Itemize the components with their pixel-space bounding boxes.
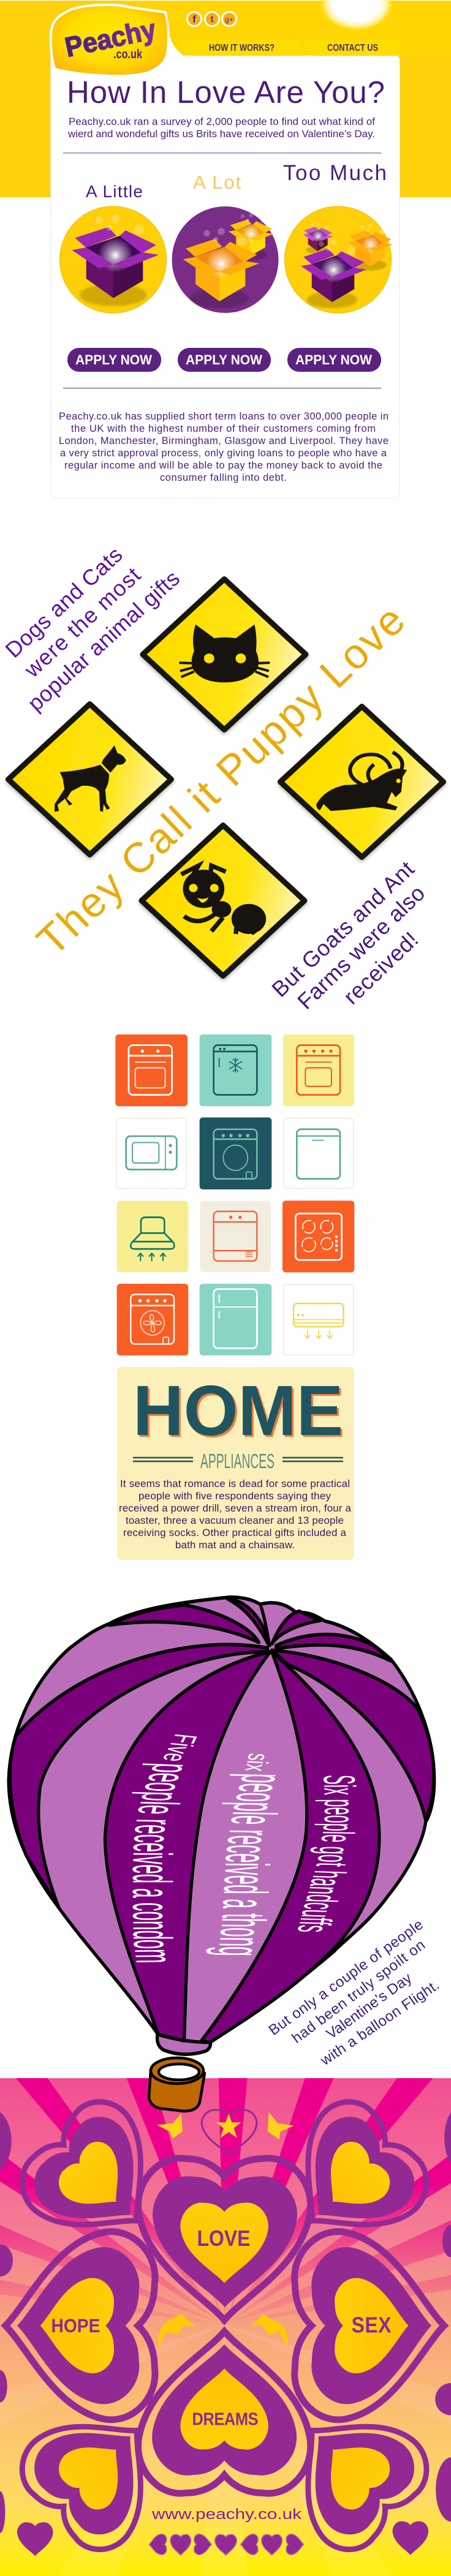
icon: microwave bbox=[116, 1118, 186, 1188]
icon: star in outlined heart bbox=[202, 2110, 257, 2155]
callout: goats and ant farms: Farms were also bbox=[292, 880, 430, 1014]
button: apply now 1: APPLY NOW bbox=[75, 352, 152, 367]
heart: top left bbox=[9, 2087, 183, 2269]
balloon callout: Valentine’s Day bbox=[324, 1970, 415, 2043]
appliances text block: toaster, three a vacuum cleaner and 13 people bbox=[126, 1515, 344, 1526]
balloon label: five people received a condom: people received a condom bbox=[132, 1763, 183, 1962]
company text block: the UK with the highest number of their customers coming from bbox=[71, 423, 376, 434]
icon: ant silhouette bbox=[181, 865, 266, 934]
icon: birds bbox=[158, 2314, 288, 2347]
company text block: consumer falling into debt. bbox=[160, 472, 287, 483]
icon: washing machine bbox=[200, 1117, 271, 1189]
button: apply now 2: APPLY NOW bbox=[186, 352, 262, 367]
label: Too Much: Too Much bbox=[283, 161, 387, 185]
white wedge beside logo bbox=[165, 31, 184, 56]
appliances text block: people with five respondents saying they bbox=[138, 1490, 331, 1502]
icon: small hearts bbox=[17, 2521, 428, 2556]
balloon callout: with a balloon Flight. bbox=[317, 1976, 442, 2069]
icon: dog silhouette bbox=[55, 745, 126, 812]
panel: yellow header band bbox=[0, 0, 451, 197]
website url: www.peachy.co.uk bbox=[151, 2506, 302, 2523]
heart: HOPE bbox=[6, 2232, 155, 2420]
nav link: contact us: CONTACT US bbox=[327, 43, 378, 53]
callout: goats and ant farms: received! bbox=[338, 927, 423, 1009]
balloon label: six: six bbox=[245, 1753, 268, 1771]
icon: yellow circle with purple box bbox=[60, 206, 167, 313]
heart: SEX: SEX bbox=[352, 2313, 392, 2338]
icon: cat silhouette bbox=[179, 625, 270, 682]
title: How In Love Are You? bbox=[67, 75, 385, 110]
heart: bottom left bbox=[9, 2382, 183, 2564]
heart: SEX bbox=[295, 2232, 444, 2420]
balloon label: six people received a thong: people received a thong bbox=[206, 1774, 278, 1955]
appliances text block bbox=[119, 1478, 352, 1551]
subheading: appliances: APPLIANCES bbox=[200, 1450, 275, 1472]
balloon callout: had been truly spoilt on bbox=[289, 1937, 428, 2047]
callout: dogs and cats: were the most bbox=[19, 562, 145, 683]
icon: fan oven bbox=[117, 1284, 188, 1355]
sunburst rays bbox=[0, 2078, 451, 2325]
icon: purple circle with orange boxes bbox=[172, 206, 278, 313]
button: apply now 3: APPLY NOW bbox=[295, 352, 372, 367]
sign: ant bbox=[142, 826, 305, 976]
panel: bottom hearts poster bbox=[0, 2078, 451, 2576]
icon: butterflies bbox=[157, 2112, 294, 2139]
button: apply now 1 bbox=[67, 348, 161, 372]
nav link: how it works: HOW IT WORKS? bbox=[209, 43, 275, 53]
icon: fridge bbox=[200, 1284, 271, 1355]
appliances text block: It seems that romance is dead for some practical bbox=[120, 1478, 350, 1489]
intro text: Peachy.co.uk ran a survey of 2,000 people to find out what kind of bbox=[69, 116, 375, 127]
heart: LOVE bbox=[138, 2158, 311, 2320]
appliances text block: receiving socks. Other practical gifts included a bbox=[123, 1527, 347, 1538]
logo wordmark: Peachy bbox=[62, 13, 159, 63]
panel: home appliance icons bbox=[115, 1034, 354, 1355]
intro text bbox=[67, 116, 375, 140]
icon: yellow circle with three boxes bbox=[284, 206, 393, 313]
heart: LOVE: LOVE bbox=[197, 2226, 250, 2251]
heart: bottom right bbox=[266, 2382, 441, 2564]
partial hearts at edges bbox=[0, 2109, 451, 2533]
balloon label: five people received a condom bbox=[132, 1763, 183, 1962]
balloon label: six bbox=[245, 1753, 268, 1771]
icon: goat silhouette bbox=[316, 752, 407, 811]
balloon basket bbox=[149, 2058, 205, 2111]
icon: dishwasher bbox=[284, 1118, 354, 1188]
balloon callout: But only a couple of people bbox=[266, 1916, 426, 2039]
company text block bbox=[59, 411, 388, 483]
sign: dog bbox=[9, 704, 172, 855]
appliances text block: received a power drill, seven a stream iron, four a bbox=[119, 1502, 352, 1514]
social icons: f bbox=[192, 13, 196, 25]
appliances text block: bath mat and a chainsaw. bbox=[175, 1539, 295, 1551]
heading: HOME: HOME bbox=[133, 1371, 343, 1450]
heart: top right bbox=[266, 2087, 441, 2269]
sign: goat bbox=[281, 707, 444, 857]
balloon bbox=[7, 1595, 442, 2113]
heart: HOPE: HOPE bbox=[51, 2315, 100, 2337]
icon: oven bbox=[115, 1034, 188, 1106]
company text block: a very strict approval process, only giving loans to people who have a bbox=[60, 448, 387, 459]
logo: Peachy.co.uk bbox=[51, 5, 169, 76]
icon: cooker hood bbox=[117, 1201, 188, 1272]
icon: electric cooker bbox=[200, 1201, 271, 1272]
heart: DREAMS: DREAMS bbox=[192, 2409, 259, 2429]
icon: cooker bbox=[283, 1034, 354, 1106]
callout: dogs and cats: Dogs and Cats bbox=[0, 542, 127, 663]
panel: home appliances text bbox=[117, 1367, 354, 1560]
button: apply now 3 bbox=[287, 348, 381, 372]
button: apply now 2 bbox=[178, 348, 271, 372]
callout: goats and ant farms: But Goats and Ant bbox=[267, 856, 419, 1002]
callout: dogs and cats: popular animal gifts bbox=[23, 565, 184, 716]
intro text: wierd and wondeful gifts us Brits have received on Valentine’s Day. bbox=[67, 128, 375, 140]
balloon label: six people got handcuffs: Six people got handcuffs bbox=[298, 1776, 357, 1932]
icon: row of small hearts bbox=[149, 2534, 304, 2555]
lower light rays bbox=[0, 2325, 451, 2576]
heart: DREAMS bbox=[138, 2332, 311, 2493]
balloon label: Five: Five bbox=[164, 1734, 197, 1761]
rules beside subheading bbox=[133, 1458, 343, 1461]
icon: air conditioner bbox=[284, 1284, 354, 1355]
heading: HOME: HOME bbox=[135, 1373, 345, 1452]
company text block: London, Manchester, Birmingham, Glasgow and Liverpool. They have bbox=[59, 435, 388, 446]
heading: They Call it Puppy Love: They Call it Puppy Love bbox=[28, 596, 414, 965]
logo domain: .co.uk bbox=[113, 48, 143, 61]
social icons: g+ bbox=[225, 15, 233, 24]
navigation tabs bbox=[178, 39, 400, 56]
company text block: regular income and will be able to pay the money back to avoid the bbox=[64, 460, 382, 471]
label: A Lot: A Lot bbox=[193, 171, 241, 193]
label: A Little: A Little bbox=[86, 182, 143, 201]
balloon envelope bbox=[9, 1597, 434, 2054]
social icons bbox=[188, 12, 237, 26]
sign: cat bbox=[143, 579, 306, 730]
icon: freezer bbox=[200, 1034, 271, 1106]
panel: white card bbox=[51, 56, 400, 498]
balloon label: Five bbox=[164, 1734, 197, 1761]
icon: hob bbox=[282, 1200, 354, 1273]
social icons: t bbox=[211, 14, 213, 24]
company text block: Peachy.co.uk has supplied short term loans to over 300,000 people in bbox=[59, 411, 388, 422]
